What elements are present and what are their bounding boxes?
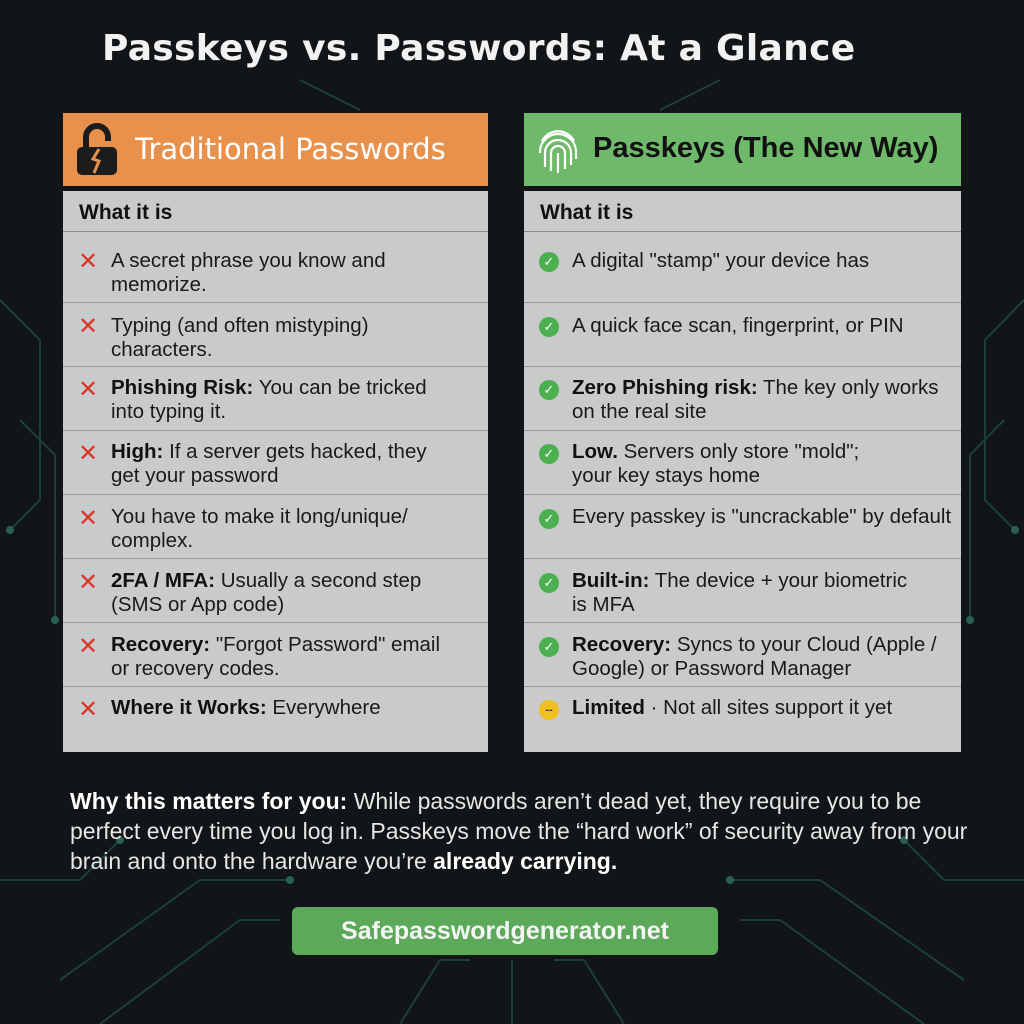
- table: passkeys: ✓: [544, 254, 554, 269]
- text block: why this matters: [70, 788, 967, 874]
- table: traditional passwords: What it is: [79, 201, 172, 224]
- table: traditional passwords: memorize.: [111, 273, 207, 296]
- table: passkeys: Recovery: Syncs to your Cloud (Apple /: [572, 633, 937, 656]
- table: traditional passwords: ✕: [78, 440, 98, 467]
- panel: traditional passwords: [63, 113, 488, 752]
- table: traditional passwords: Phishing Risk: You can be tricked: [111, 376, 427, 399]
- table: traditional passwords: ✕: [78, 313, 98, 340]
- table: traditional passwords: You have to make it long/unique/: [111, 505, 408, 528]
- table: traditional passwords: ✕: [78, 505, 98, 532]
- table: traditional passwords: complex.: [111, 529, 193, 552]
- button: website: Safepasswordgenerator.net: [341, 917, 669, 945]
- table: traditional passwords: characters.: [111, 338, 212, 361]
- table: passkeys: A digital "stamp" your device has: [572, 249, 869, 272]
- table: passkeys: Limited · Not all sites support it yet: [572, 696, 892, 719]
- table: passkeys: Zero Phishing risk: The key only works: [572, 376, 938, 399]
- table: traditional passwords: High: If a server gets hacked, they: [111, 440, 427, 463]
- table: traditional passwords: ✕: [78, 248, 98, 275]
- table: traditional passwords: (SMS or App code): [111, 593, 284, 616]
- button: website: [292, 907, 718, 955]
- text block: why this matters: Why this matters for you: While passwords aren’t dead yet, they require you to be: [70, 788, 921, 814]
- table: traditional passwords: ✕: [78, 696, 98, 723]
- icon: fingerprint: [538, 130, 578, 173]
- table: passkeys: Every passkey is "uncrackable" by default: [572, 505, 951, 528]
- table: traditional passwords: Typing (and often mistyping): [111, 314, 369, 337]
- table: passkeys: on the real site: [572, 400, 706, 423]
- title: Passkeys vs. Passwords: At a Glance: [102, 28, 855, 69]
- table: traditional passwords: Where it Works: Everywhere: [111, 696, 381, 719]
- header: passkeys: Passkeys (The New Way): [593, 132, 938, 164]
- table: traditional passwords: into typing it.: [111, 400, 226, 423]
- table: passkeys: is MFA: [572, 593, 635, 616]
- text block: why this matters: brain and onto the hardware you’re already carrying.: [70, 848, 617, 874]
- text block: why this matters: perfect every time you log in. Passkeys move the “hard work” of security away from your: [70, 818, 967, 844]
- header: traditional passwords: [63, 113, 488, 186]
- table: passkeys: What it is: [540, 201, 633, 224]
- table: traditional passwords: get your password: [111, 464, 279, 487]
- icon: broken padlock: [77, 123, 117, 175]
- table: passkeys: ✓: [544, 511, 554, 526]
- table: traditional passwords: Recovery: "Forgot Password" email: [111, 633, 440, 656]
- table: traditional passwords: ✕: [78, 569, 98, 596]
- table: passkeys: ✓: [544, 382, 554, 397]
- table: passkeys: ✓: [544, 575, 554, 590]
- header: passkeys: [524, 113, 961, 186]
- table: traditional passwords: ✕: [78, 633, 98, 660]
- table: passkeys: Built-in: The device + your biometric: [572, 569, 907, 592]
- table: traditional passwords: or recovery codes.: [111, 657, 280, 680]
- table: traditional passwords: 2FA / MFA: Usually a second step: [111, 569, 421, 592]
- table: passkeys: ✓: [544, 639, 554, 654]
- table: traditional passwords: [63, 191, 488, 752]
- table: passkeys: --: [545, 704, 553, 716]
- table: passkeys: your key stays home: [572, 464, 760, 487]
- table: traditional passwords: A secret phrase you know and: [111, 249, 386, 272]
- table: passkeys: ✓: [544, 446, 554, 461]
- table: passkeys: [524, 191, 961, 752]
- header: traditional passwords: Traditional Passwords: [135, 132, 446, 166]
- table: traditional passwords: ✕: [78, 376, 98, 403]
- table: passkeys: A quick face scan, fingerprint, or PIN: [572, 314, 904, 337]
- table: passkeys: Google) or Password Manager: [572, 657, 851, 680]
- table: passkeys: ✓: [544, 319, 554, 334]
- panel: passkeys: [524, 113, 961, 752]
- table: passkeys: Low. Servers only store "mold";: [572, 440, 859, 463]
